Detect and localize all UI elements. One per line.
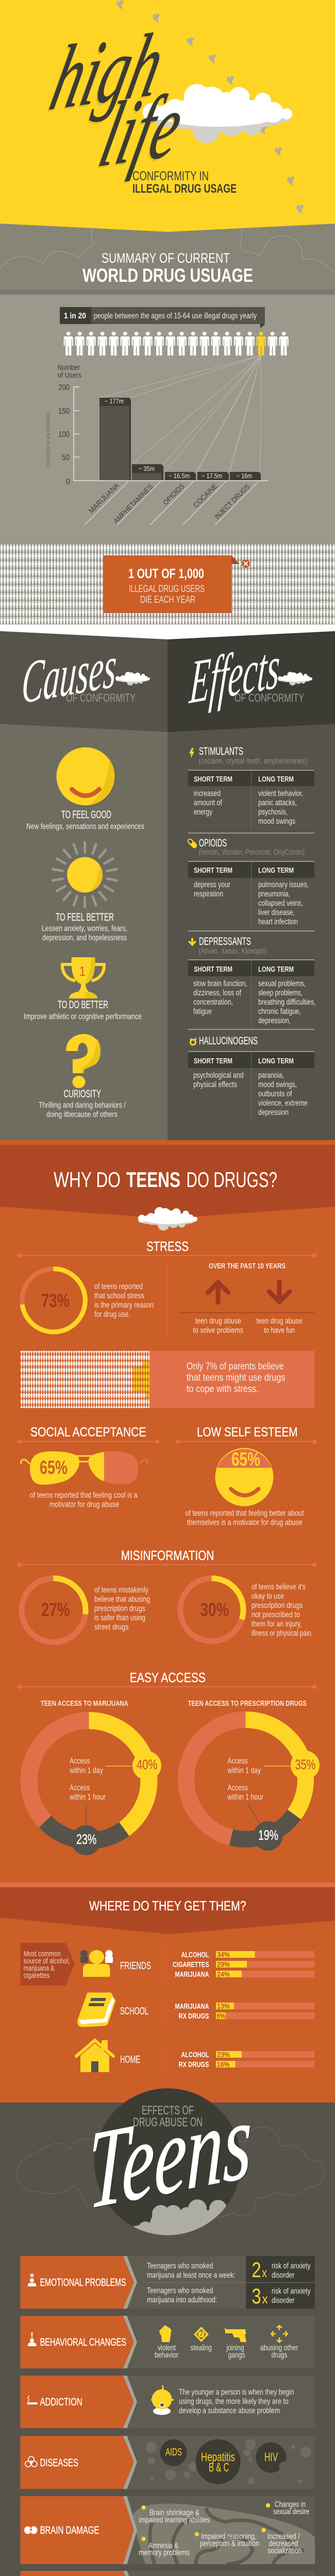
table: hallucinogens: LONG TERM [258,1057,294,1065]
row: behavioral changes: drugs [271,2351,288,2360]
table: hallucinogens: physical effects [193,1080,237,1089]
callout: 1 in 20 [60,307,265,328]
text: to feel better [42,911,127,942]
bar chart: number of users: INJECT DRUGS [213,482,252,521]
bar chart: school: RX DRUGS [178,2012,209,2021]
callout: most common source: marijuana & [24,1964,55,1973]
table: stimulants: LONG TERM [258,775,294,784]
icon: trophy [62,957,104,998]
bullets: brain effects: decreased [269,2539,298,2548]
callout: most common source [20,1943,75,1986]
bar chart: home: ALCOHOL [181,2050,209,2059]
heading [82,250,253,286]
panel: crowd of people with death statistic [0,544,335,624]
table: stimulants: amount of [194,799,223,807]
callout: 1 out of 1,000: ILLEGAL DRUG USERS [129,584,205,595]
row: behavioral changes: stealing [191,2344,212,2352]
section: effects of drug abuse on teens [0,2077,335,2576]
panel: misinformation: not prescribed to [252,1611,300,1619]
table: hallucinogens: HALLUCINOGENS [199,1035,258,1047]
chart: 30% ring [180,1579,243,1641]
table: opioids: SHORT TERM [194,866,232,875]
heading: effects: OF CONFORMITY [234,691,304,704]
row: behavioral changes: violent [158,2344,176,2352]
bar chart: number of users [45,364,268,525]
bar chart: number of users: AMPHETAMINES [112,482,155,525]
donut chart: marijuana access: 40% [137,1757,158,1772]
donut chart: prescription drug access: within 1 day [227,1766,261,1775]
bar chart: number of users: 200 [58,383,70,392]
row: emotional problems: EMOTIONAL PROBLEMS [40,2277,126,2289]
subtitle [132,169,237,196]
callout: 1 out of 1,000: 1 OUT OF 1,000 [128,566,204,581]
heading: EFFECTS OF [142,2104,194,2117]
table: depressants: chronic fatigue, [258,1007,301,1016]
table: hallucinogens: SHORT TERM [194,1057,232,1065]
row: emotional problems: marijuana into adulthood: [147,2296,217,2304]
icon: smiley [57,747,115,806]
icon: cigarette [27,2396,37,2404]
panel: misinformation: prescription drugs [94,1604,145,1613]
bullets: brain effects: sexual desire [273,2507,309,2516]
panel: effects of conformity [167,631,335,1140]
icon: gun [225,2328,246,2342]
table: stimulants: panic attacks, [258,799,297,807]
icon: birds flying through the cloud [116,0,304,214]
heading: WHY DO [54,1167,121,1192]
table: depressants: depression, [258,1016,291,1025]
bar chart: friends [173,1951,314,1979]
table: stimulants: violent behavior, [258,789,303,798]
icon: friends [80,1950,113,1977]
text: to do better [24,999,142,1021]
chart: 27% ring [22,1579,86,1642]
table: opioids: respiration [194,890,223,899]
text: curiosity: doing itbecause of others [46,1110,118,1119]
donut chart: marijuana access: TEEN ACCESS TO MARIJUANA [41,1699,128,1708]
icon: biohazard [25,2456,37,2467]
panel: misinformation: of teens believe it's [252,1583,306,1591]
text: school stress: for drug use. [94,1310,130,1319]
table: depressants: sexual problems, [258,979,306,988]
table: depressants: fatigue [193,1007,212,1016]
donut chart: prescription drug access: Access [228,1784,248,1792]
table: opioids: liver disease, [258,908,295,917]
bar chart: school: 6% [216,2011,226,2020]
row: emotional problems [20,2256,315,2309]
icon: person with x [28,2274,36,2286]
donut chart: prescription drug access: Access [228,1757,248,1766]
text: school stress: that school stress [94,1292,144,1300]
table: stimulants: SHORT TERM [194,775,232,784]
bullets: brain effects: Amnesia & [148,2541,179,2550]
text: school stress: of teens reported [94,1282,143,1291]
table: stimulants: STIMULANTS [199,745,243,757]
row: behavioral changes: behavior [155,2351,178,2360]
callout: most common source: cigarettes [24,1972,49,1980]
heading: DO DRUGS? [187,1167,277,1192]
bar chart: number of users: COCAINE [192,482,219,509]
panel: only 7% of parents: Only 7% of parents believe [187,1361,284,1372]
row: emotional problems: marijuana at least once a week: [147,2271,236,2280]
chart: disease bubbles: AIDS [165,2447,182,2458]
chart: disease bubbles: Hepatitis [201,2450,235,2464]
chart: ten year trend arrows: teen drug abuse [257,1317,302,1326]
icon: four way arrows [271,2326,288,2342]
donut chart: marijuana access: Access [70,1784,90,1792]
row: emotional problems: disorder [272,2271,295,2280]
icon: school book [77,1993,115,2027]
panel: only 7% of parents: to cope with stress. [187,1384,259,1395]
bullets: brain effects: Brain shrinkage & [149,2509,200,2517]
bar chart: friends: 34% [217,1951,230,1959]
bar chart: friends: MARIJUANA [175,1970,209,1979]
icon: sunglasses [21,1451,147,1485]
table: depressants: SHORT TERM [194,965,232,974]
chart: 27% ring: 27% [41,1599,70,1620]
heading: effects: Effects [187,632,282,718]
table: stimulants: increased [194,789,221,798]
row: addiction [20,2376,315,2428]
table: depressants [188,936,315,1030]
bar chart: number of users: ~ 17.5m [202,472,222,480]
icon: person with exclamation [28,2333,36,2346]
bar chart: number of users: ~ 177m [105,397,124,405]
icon: sunglasses: 65% [40,1457,68,1478]
row: behavioral changes [20,2316,315,2368]
table: depressants: DEPRESSANTS [199,936,251,947]
text: to do better: Improve athletic or cognitive performance [24,1012,142,1021]
bar chart: number of users: 100 [58,430,70,439]
row: emotional problems: disorder [272,2296,295,2305]
subtitle: ILLEGAL DRUG USAGE [132,182,237,196]
heading: DRUG ABUSE ON [133,2115,203,2129]
table: stimulants: psychosis, [258,808,288,817]
section: where do they get them: FRIENDS [120,1960,151,1972]
badge: teens circle [93,2089,250,2235]
chart: 73% ring [22,1269,85,1332]
bar chart: number of users: 150 [58,407,70,416]
callout: most common source: Most common [24,1950,61,1958]
text: to feel better: Lessen anxiety, worries, fears, [42,924,127,933]
row: emotional problems: x [262,2291,268,2307]
row: behavioral changes: joining [226,2344,244,2352]
text: to feel good: TO FEEL GOOD [61,809,111,821]
table: depressants: breathing difficulties, [258,998,315,1007]
table: hallucinogens: psychological and [193,1071,243,1080]
panel: misinformation: illness or physical pain. [252,1629,313,1638]
table: opioids [187,837,314,931]
table: hallucinogens: depression [258,1108,289,1117]
panel: easy access: EASY ACCESS [130,1670,206,1685]
bullets: brain effects: impaired learning abilities [139,2516,210,2524]
panel: social acceptance [18,1425,160,1509]
pictogram: twenty people, one highlighted [64,332,289,355]
subtitle: CONFORMITY IN [132,169,209,183]
table: depressants: (Ativan, Xanax, Klonopin) [199,947,267,956]
bullets: brain effects: Changes in [275,2500,306,2509]
text: to feel better: depression, and hopelessness [42,934,127,942]
row: addiction: The younger a person is when they begin [179,2388,294,2397]
chart: ten year trend arrows: OVER THE PAST 10 YEARS [209,1262,286,1270]
icon: baby head [151,2385,174,2415]
bar chart: number of users: (measured in millions) [45,412,52,467]
icon: large cloud [143,84,292,143]
callout: 1 in 20: 1 in 20 [64,312,86,320]
heading: SUMMARY OF CURRENT [102,250,230,266]
row: diseases [20,2436,315,2489]
row: emotional problems: 3 [252,2284,261,2308]
row: emotional problems: risk of anxiety [272,2287,311,2296]
table: depressants: slow brain function, [193,979,247,988]
bullets: brain effects: memory problems [139,2548,190,2557]
row: behavioral changes: abusing other [260,2344,298,2352]
panel: misinformation: believe that abusing [94,1595,150,1604]
chart: disease bubbles: HIV [264,2450,278,2464]
title: high life: high [40,14,172,132]
table: depressants: concentration, [193,998,233,1007]
table: stimulants [188,745,314,834]
text: school stress: is the primary reason [94,1301,154,1310]
bullets: brain effects: Impaired reasoning, [201,2532,257,2541]
bar chart: friends: 24% [217,1970,230,1978]
panel: easy access [18,1670,320,1855]
panel: low self esteem: of teens reported that feeling better about [186,1509,304,1518]
panel: misinformation [18,1548,316,1642]
table: hallucinogens: outbursts of [258,1090,292,1098]
bar chart: number of users: ~ 16m [237,472,252,480]
bar chart: friends: CIGARETTES [173,1960,209,1969]
section: where do they get them [0,1883,335,2103]
title: high life: life [91,73,193,187]
heading: stress [18,1239,316,1258]
table: opioids: collapsed veins, [258,899,303,908]
panel: misinformation: MISINFORMATION [121,1548,214,1563]
chart: ten year trend arrows: to have fun [264,1326,295,1335]
table: depressants: dizziness, loss of [193,989,242,997]
panel: misinformation: of teens mistakenly [94,1586,148,1595]
text: curiosity: Thrilling and daring behaviors / [39,1101,126,1110]
panel: misinformation: prescription drugs [252,1601,303,1610]
row: emotional problems: Teenagers who smoked [147,2262,213,2270]
text: curiosity: CURIOSITY [64,1088,101,1100]
heading [54,1167,277,1192]
bar chart: number of users: ~ 35m [139,465,155,472]
text: curiosity [39,1088,126,1119]
title: high life: high [42,12,174,130]
icon: partially filled smiley: 65% [231,1449,260,1470]
bar chart: school [175,2002,314,2021]
panel: social acceptance: of teens reported that feeling cool is a [30,1491,138,1500]
callout: 1 out of 1,000: DIE EACH YEAR [140,595,195,605]
row: brain damage: BRAIN DAMAGE [40,2524,99,2536]
heading: stress: STRESS [146,1239,189,1254]
row: emotional problems: risk of anxiety [272,2262,311,2270]
icon: trophy: 1 [79,963,86,979]
panel: misinformation: okay to use [252,1592,284,1601]
table: opioids: depress your [194,880,230,889]
title: high life: life [89,75,191,189]
bar chart: number of users: ~ 16.5m [169,472,190,480]
donut chart: prescription drug access [186,1699,320,1851]
chart: disease bubbles [146,2439,311,2484]
bullets: brain effects: socialization [267,2547,301,2555]
section: where do they get them: HOME [120,2054,140,2065]
section: where do they get them: SCHOOL [120,2006,148,2017]
donut chart: prescription drug access: within 1 hour [227,1793,263,1802]
bar chart: number of users: 0 [66,478,70,486]
table: hallucinogens [188,1035,314,1122]
panel: low self esteem [175,1425,316,1527]
table: opioids: heart infection [258,918,298,926]
row: addiction: develop a substance abuse problem [179,2406,280,2415]
heading: causes: OF CONFORMITY [66,691,136,704]
bar chart: number of users: Number [58,364,80,372]
callout: 1 in 20: people between the ages of 15-64 use illegal drugs yearly [94,312,257,320]
panel: causes of conformity [0,631,167,1140]
row: addiction: ADDICTION [40,2396,82,2408]
row: emotional problems: 2 [252,2258,261,2282]
section: world drug usage heading [0,227,335,295]
text: to feel good [26,809,144,831]
chart: 30% ring: 30% [200,1599,229,1620]
bar chart: friends: ALCOHOL [181,1951,209,1959]
bar chart: home [178,2050,314,2069]
panel: misinformation: is safer than using [94,1614,145,1622]
text: to feel better: TO FEEL BETTER [56,911,114,923]
panel: only 7% of parents: that teens might use drugs [187,1372,286,1383]
heading: TEENS [126,1167,180,1192]
chart: ten year trend arrows [179,1262,314,1335]
donut chart: marijuana access: 23% [76,1832,96,1847]
table: opioids: (heroin, Vicodin, Percocet, OxyContin) [199,848,305,857]
title: teens: Teens [88,2078,254,2233]
section: yellow title header [0,0,335,295]
chart: 73% ring: 73% [41,1290,70,1311]
bar chart: number of users: MARIJUANA [87,481,121,515]
panel: world drug statistics [0,295,335,544]
text: school stress [94,1282,154,1319]
panel: misinformation: street drugs [94,1623,129,1632]
panel: social acceptance: motivator for drug abuse [49,1500,119,1509]
table: opioids: OPIOIDS [199,837,227,849]
panel: low self esteem: LOW SELF ESTEEM [197,1425,298,1439]
row: addiction: using drugs, the more likely they are to [179,2397,289,2406]
bullets: brain effects: perception & intuition [200,2539,259,2548]
table: stimulants: energy [194,808,212,817]
bar chart: home: 16% [216,2060,230,2068]
table: depressants: sleep problems, [258,989,303,997]
table: hallucinogens: violence, extreme [258,1099,308,1108]
callout: most common source: source of alcohol, [24,1957,70,1965]
donut chart: prescription drug access: 35% [295,1757,315,1772]
bar chart: number of users: 50 [62,453,70,462]
donut chart: marijuana access: Access [70,1757,90,1766]
row: diseases: DISEASES [40,2457,78,2469]
panel: misinformation: them for an injury, [252,1620,302,1629]
bar chart: school: 13% [217,2002,230,2010]
donut chart: marijuana access: within 1 hour [69,1793,106,1802]
chart: ten year trend arrows: to solve problems [193,1326,243,1335]
table: stimulants: mood swings [258,817,295,826]
row: car accidents [20,2571,315,2576]
panel: only 7% of parents [20,1351,314,1408]
icon: brain [24,2527,37,2534]
table: opioids: pulmonary issues, [258,880,309,889]
table: opioids: LONG TERM [258,866,294,875]
illustration: brain [132,2504,315,2564]
bar chart: friends: 29% [217,1960,230,1968]
bullets: brain effects [139,2500,309,2557]
icon: question mark [66,1034,100,1088]
table: hallucinogens: paranoia, [258,1071,284,1080]
heading: WORLD DRUG USUAGE [82,265,253,286]
table: hallucinogens: mood swings, [258,1080,297,1089]
chart: ten year trend arrows: teen drug abuse [195,1317,241,1326]
bullets: brain effects: Increased / [267,2532,300,2541]
donut chart: marijuana access: within 1 day [69,1766,103,1775]
row: emotional problems: x [262,2265,267,2280]
table: depressants: LONG TERM [258,965,294,974]
donut chart: marijuana access [29,1699,161,1855]
panel: social acceptance: SOCIAL ACCEPTANCE [30,1425,146,1439]
icon: cloud [138,1207,197,1231]
text: to do better: TO DO BETTER [58,999,108,1011]
callout: 1 out of 1,000 [103,555,250,613]
icon: home [76,2040,113,2072]
donut chart: prescription drug access: 19% [258,1827,278,1843]
icon: partially filled smiley [215,1448,273,1506]
row: brain damage [20,2496,315,2564]
chart: disease bubbles: B & C [209,2461,229,2475]
bar chart: number of users: of Users [58,371,81,380]
bar chart: home: RX DRUGS [178,2060,209,2069]
panel: low self esteem: themselves is a motivator for drug abuse [187,1518,303,1527]
icon: fist [159,2325,171,2342]
title: teens: Teens [87,2077,253,2232]
icon: sun [53,842,117,907]
bar chart: home: 23% [217,2050,230,2059]
text: to feel good: New feelings, sensations and experiences [26,822,144,831]
bar chart: school: MARIJUANA [175,2002,209,2011]
bar chart: number of users: OPIOIDS [161,482,186,506]
row: behavioral changes: gangs [228,2351,245,2360]
icon: stealing sign [194,2327,209,2342]
heading: causes: Causes [20,632,119,717]
table: opioids: pneumonia, [258,890,290,899]
heading [133,2104,203,2129]
row: emotional problems: Teenagers who smoked [147,2286,213,2295]
section: why do teens do drugs [0,1140,335,1883]
title: high life [40,12,193,189]
row: behavioral changes: BEHAVIORAL CHANGES [40,2336,126,2348]
heading: WHERE DO THEY GET THEM? [89,1898,246,1913]
